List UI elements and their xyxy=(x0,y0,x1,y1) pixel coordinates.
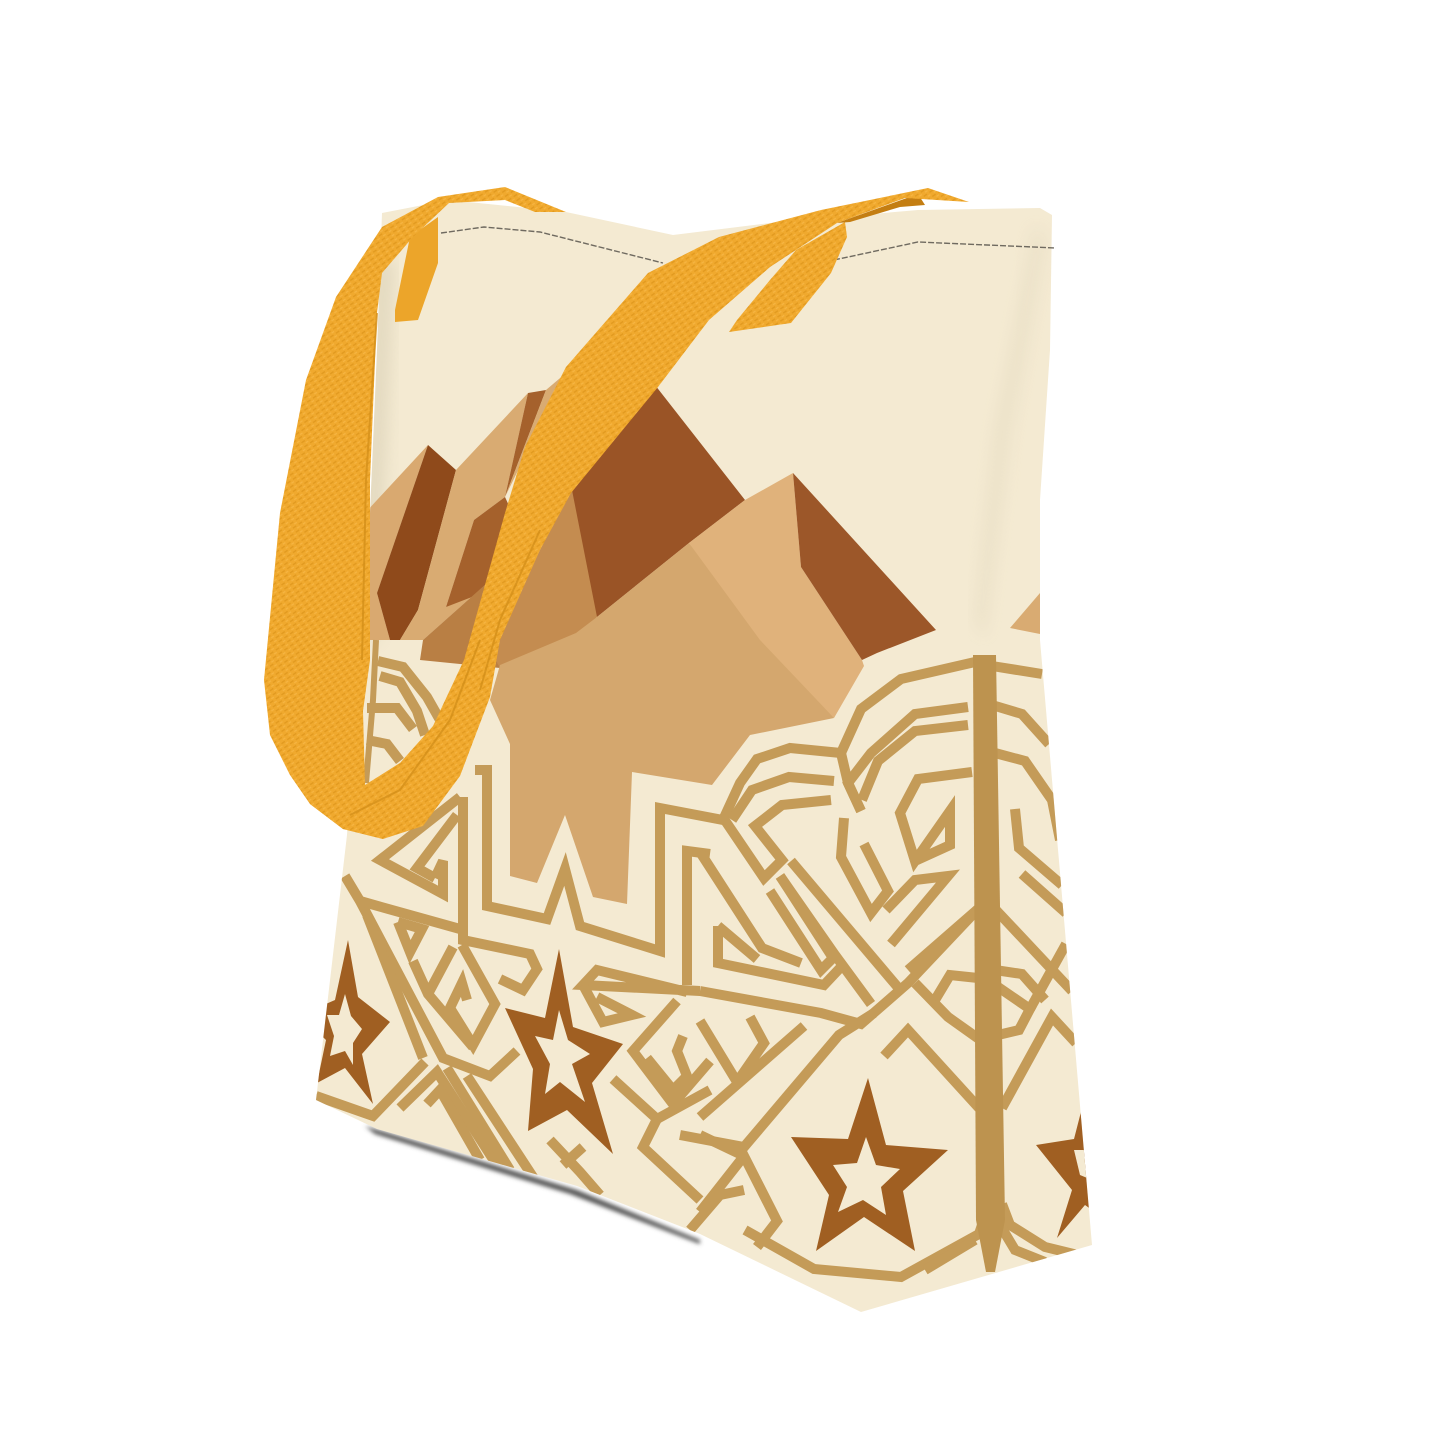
star: side panel xyxy=(1036,1112,1089,1238)
handle: right attachment tab xyxy=(729,222,847,332)
handle: front strap xyxy=(310,188,969,839)
pattern: left bands xyxy=(345,876,517,1076)
pattern: centre right arcs xyxy=(732,777,834,820)
pattern: side panel lines xyxy=(992,705,1049,744)
handle: inner strap underside xyxy=(837,194,925,223)
pattern: central seam stripe xyxy=(973,655,1005,1272)
mountain: shadowed lower slope xyxy=(420,585,500,668)
mountain: second dark band xyxy=(446,390,546,607)
mountains xyxy=(360,373,1040,904)
pattern: chevron border xyxy=(475,662,975,951)
star: right centre xyxy=(791,1078,948,1251)
ground shadow xyxy=(365,1126,700,1244)
illustration: tote bag xyxy=(264,187,1092,1312)
pattern: bottom band xyxy=(700,1156,777,1247)
fabric shading and fold xyxy=(358,225,1045,640)
mountain: side panel fragment xyxy=(1010,593,1040,634)
pattern: upper left arcs xyxy=(378,661,440,720)
mountain: central base xyxy=(490,543,834,904)
mountain: sliver xyxy=(506,378,560,496)
bag body xyxy=(316,200,1092,1312)
star: far left xyxy=(318,940,390,1104)
mountain: far left light face xyxy=(370,445,428,640)
pattern: central spiral xyxy=(583,970,700,992)
mountain: main dark peak xyxy=(560,385,745,617)
handle: strap edge detail xyxy=(350,313,540,815)
handle: back strap xyxy=(264,187,566,839)
star: left centre xyxy=(505,949,623,1154)
geometric knot pattern xyxy=(316,640,1090,1277)
stitching seam xyxy=(441,227,1056,263)
pattern: lower left diagonals xyxy=(316,1062,425,1116)
mountain: second light face xyxy=(400,393,528,640)
mountain: right peak dark face xyxy=(793,473,936,660)
mountain: far left dark face xyxy=(377,445,456,640)
mountain: right peak light face xyxy=(689,473,864,718)
handle: left attachment tab xyxy=(395,217,438,322)
pattern: left triangles xyxy=(463,797,537,990)
stars xyxy=(300,940,1092,1251)
mountain: mid tan face xyxy=(496,492,597,666)
